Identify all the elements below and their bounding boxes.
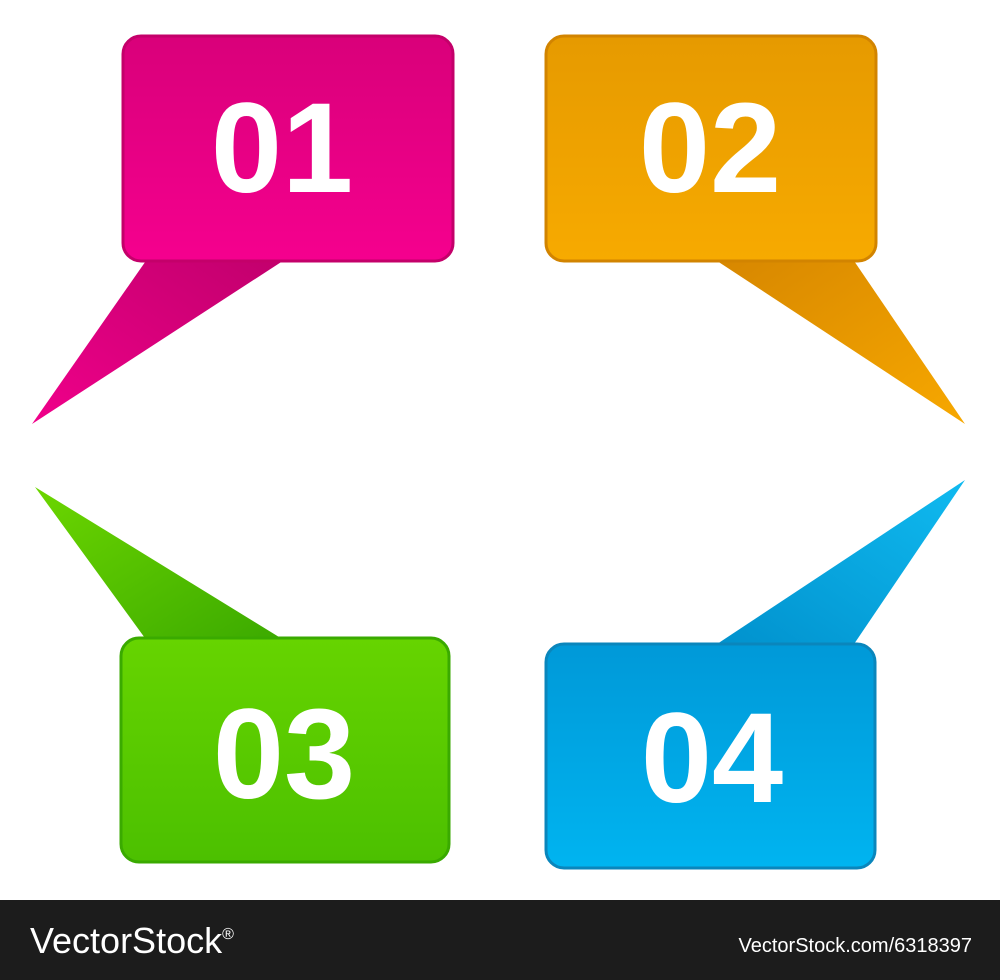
number: 03: 03	[213, 683, 355, 826]
footer bar	[0, 900, 1000, 980]
callout: 03	[35, 487, 449, 862]
tail: 01	[32, 255, 292, 424]
box: 04	[546, 644, 875, 868]
box: 02	[546, 36, 876, 261]
footer logo: ®	[222, 926, 234, 943]
footer logo: VectorStock	[30, 920, 222, 961]
callout: 02	[546, 36, 965, 424]
callout: 01	[32, 36, 453, 424]
number: 02: 02	[639, 77, 781, 220]
number: 01: 01	[211, 77, 353, 220]
callout: 04	[546, 480, 965, 868]
box: 03	[121, 638, 449, 862]
tail: 03	[35, 487, 292, 645]
number: 04: 04	[641, 687, 783, 830]
tail: 04	[708, 480, 965, 650]
tail: 02	[708, 255, 965, 424]
box: 01	[123, 36, 453, 261]
footer url: VectorStock.com/6318397	[739, 935, 972, 957]
